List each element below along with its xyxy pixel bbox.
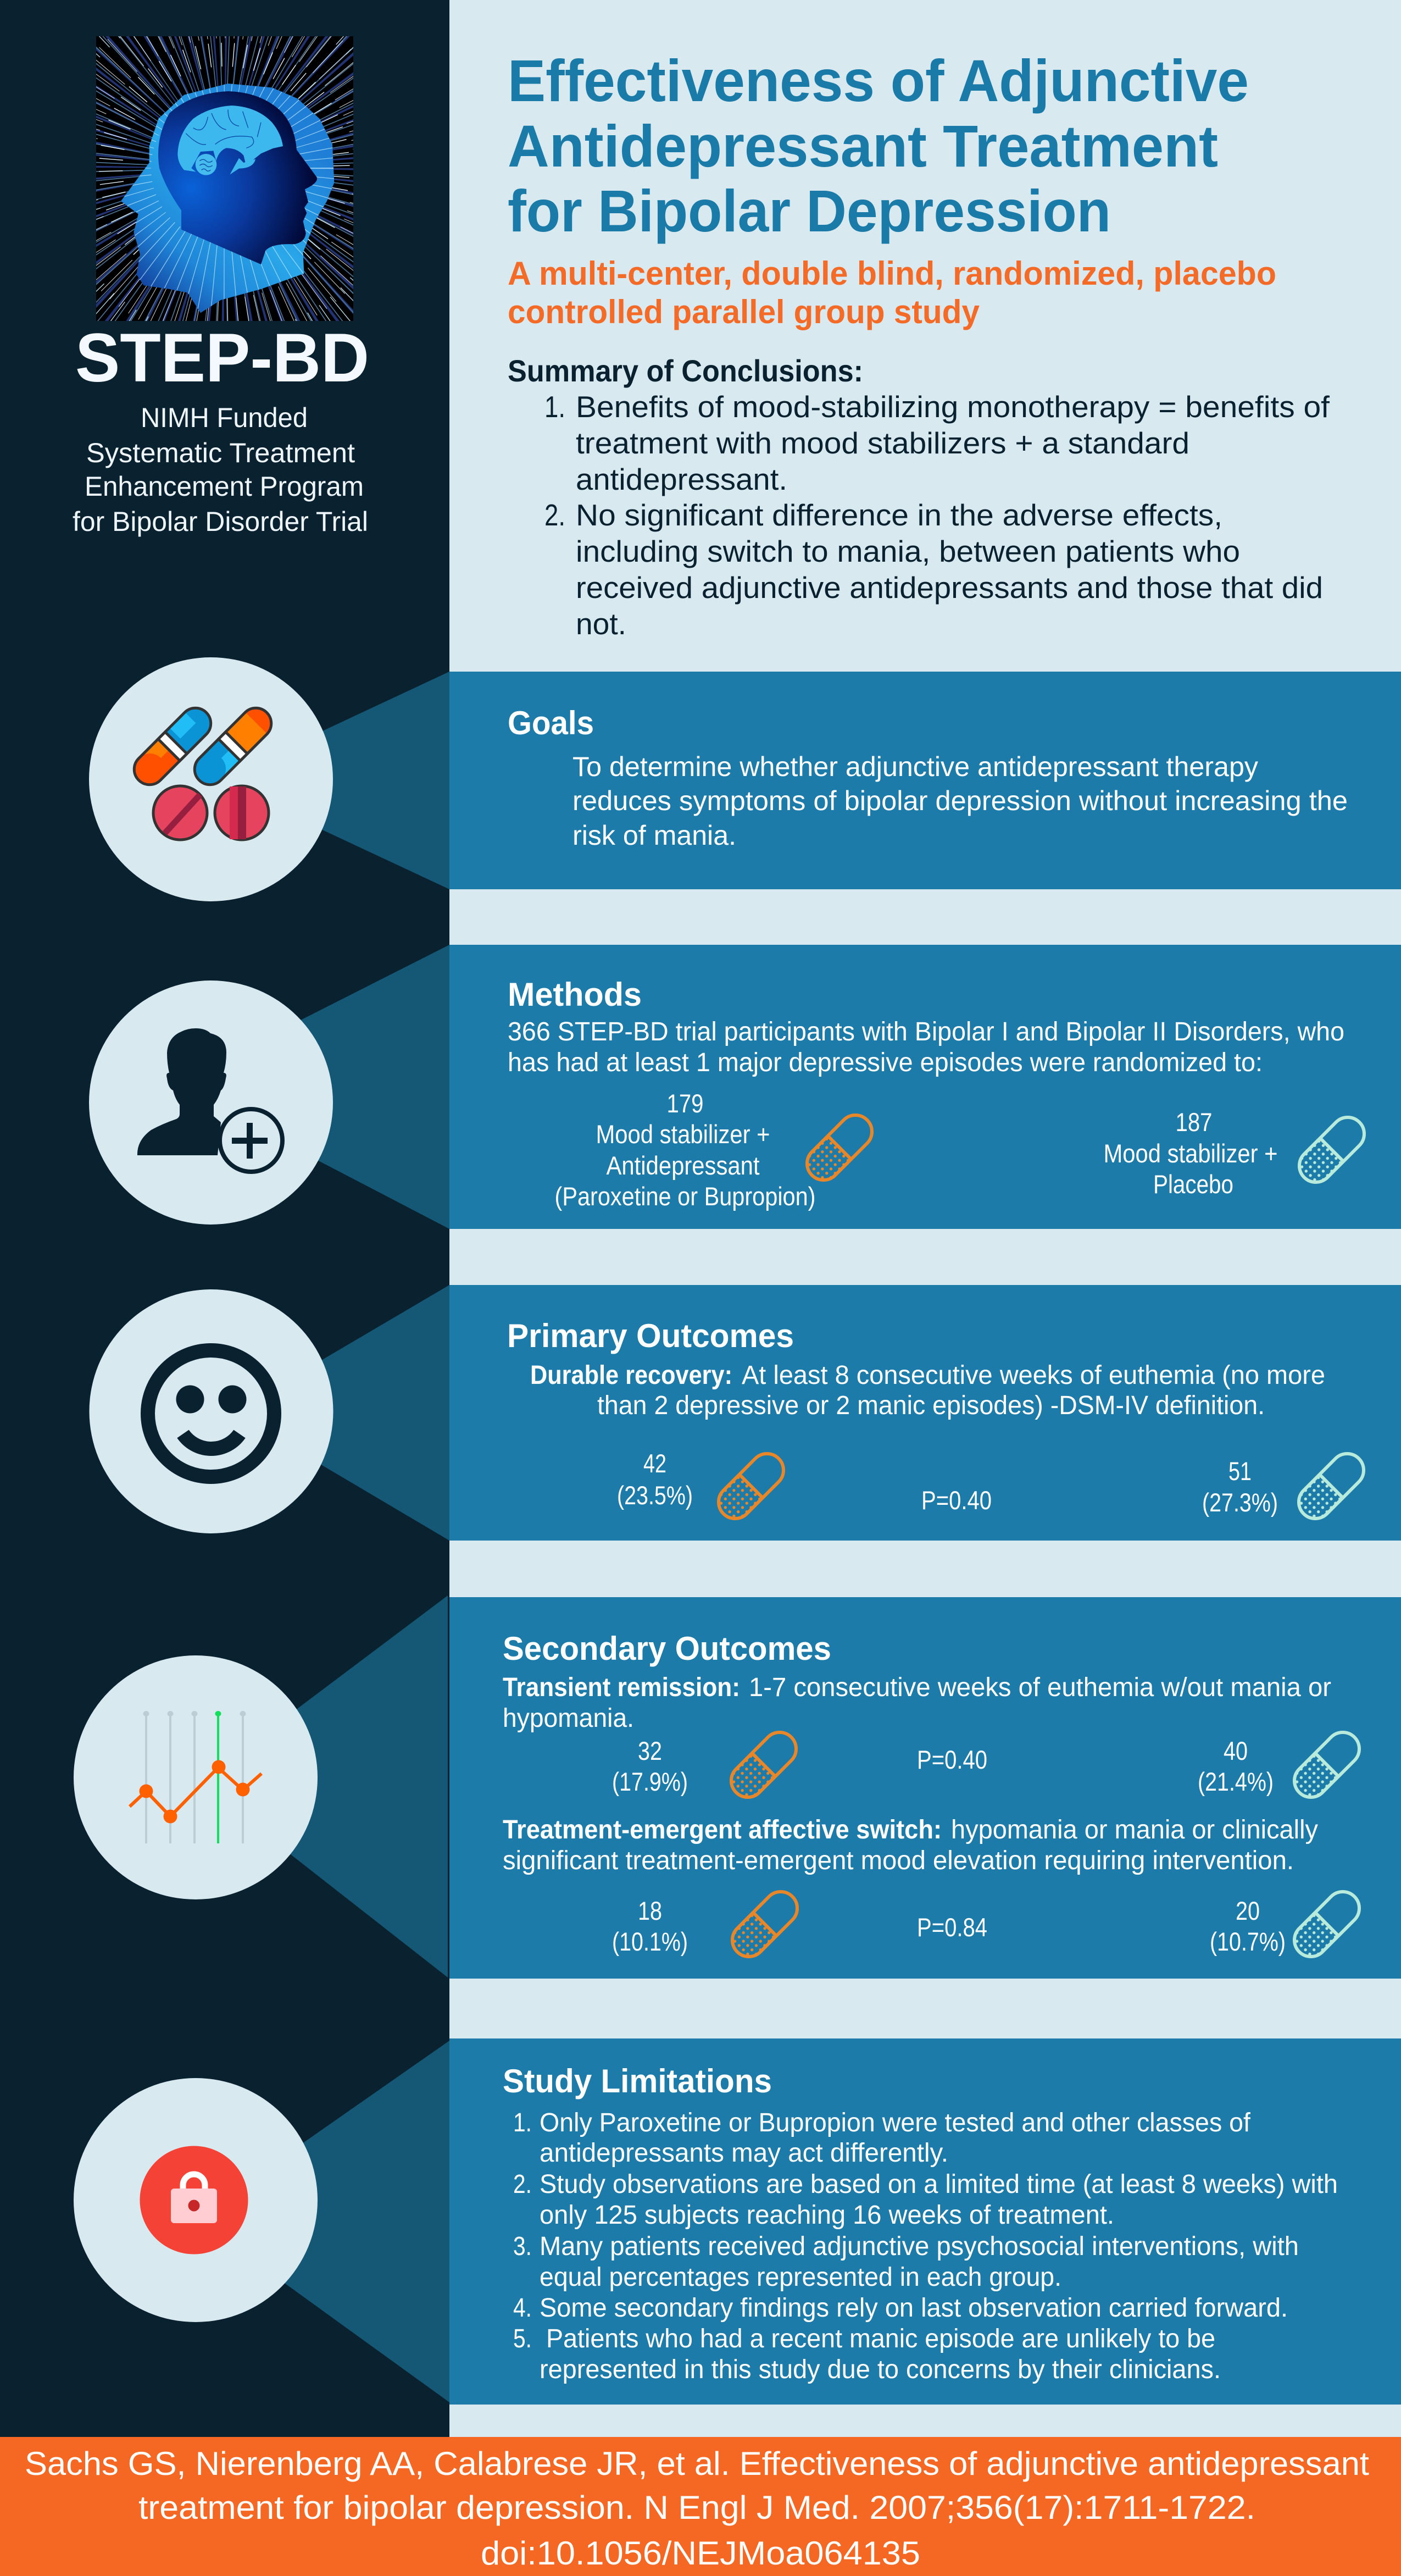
text block: limitations list: 4.	[513, 2294, 532, 2323]
panel: goals	[89, 657, 1401, 901]
heading: primary outcomes: Primary Outcomes	[507, 1317, 794, 1354]
heading: methods: Methods	[508, 976, 642, 1013]
stat: treatment arm 18: 18	[638, 1896, 662, 1925]
text block: limitations list: 1.	[513, 2108, 532, 2137]
subtitle: A multi-center, double blind, randomized, placebo	[508, 255, 1276, 292]
text block: durable recovery definition: At least 8 consecutive weeks of euthemia (no more	[742, 1361, 1325, 1390]
text block: summary of conclusions: Benefits of mood-stabilizing monotherapy = benefits of	[576, 390, 1330, 424]
text block: summary of conclusions: not.	[576, 607, 626, 641]
text block: limitations list: antidepressants may act differently.	[540, 2139, 948, 2168]
text block: goals body	[572, 751, 1348, 851]
text block: program description	[73, 402, 368, 537]
text block: goals body: To determine whether adjunctive antidepressant therapy	[572, 751, 1258, 782]
footer: citation: doi:10.1056/NEJMoa064135	[481, 2535, 920, 2572]
stat: treatment arm 32	[612, 1736, 688, 1796]
text block: limitations list: 3.	[513, 2232, 532, 2261]
text block: limitations list: equal percentages represented in each group.	[540, 2263, 1061, 2292]
icon: orange pill	[800, 1109, 879, 1187]
text block: limitations list: Many patients received adjunctive psychosocial interventions, with	[540, 2232, 1299, 2261]
title: Antidepressant Treatment	[508, 113, 1218, 179]
stat: placebo arm 20	[1210, 1896, 1286, 1956]
footer: citation: Sachs GS, Nierenberg AA, Calabrese JR, et al. Effectiveness of adjunctive antidepressant	[25, 2445, 1369, 2482]
text block: goals body: reduces symptoms of bipolar depression without increasing the	[572, 785, 1348, 816]
text block: placebo arm: Mood stabilizer +	[1103, 1139, 1278, 1168]
text block: limitations list: Some secondary findings rely on last observation carried forward.	[540, 2294, 1288, 2323]
heading: study limitations: Study Limitations	[503, 2063, 772, 2099]
stat: placebo arm 51: 51	[1228, 1456, 1252, 1486]
icon: person with plus	[137, 1028, 282, 1172]
stat: treatment arm 18: (10.1%)	[612, 1927, 688, 1956]
icon: red lock	[140, 2146, 248, 2254]
footer: citation	[0, 2437, 1401, 2576]
icon: pills and tablets	[128, 702, 277, 840]
subtitle: controlled parallel group study	[508, 293, 980, 330]
panel: methods	[89, 945, 1401, 1229]
text block: limitations list	[513, 2108, 1338, 2384]
icon: smiley face	[148, 1350, 274, 1477]
text block: durable recovery definition	[530, 1361, 1325, 1420]
text block: durable recovery definition: Durable recovery:	[530, 1361, 732, 1390]
text block: treatment arm: Antidepressant	[607, 1151, 759, 1180]
text block: summary of conclusions: including switch to mania, between patients who	[576, 534, 1240, 568]
text block: treatment-emergent affective switch: significant treatment-emergent mood elevation requiring intervention.	[503, 1846, 1294, 1875]
text block: transient remission: 1-7 consecutive weeks of euthemia w/out mania or	[749, 1673, 1331, 1702]
text block: limitations list: 5.	[513, 2324, 532, 2353]
icon: teal pill	[1292, 1447, 1370, 1525]
left sidebar	[0, 0, 449, 2437]
text block: treatment arm: 179	[667, 1089, 703, 1118]
stat: treatment arm 42	[617, 1449, 693, 1510]
text block: placebo arm: 187	[1176, 1107, 1212, 1137]
panel: secondary outcomes	[74, 1596, 1401, 1979]
stat: treatment arm 32: (17.9%)	[612, 1767, 688, 1796]
text block: treatment arm: (Paroxetine or Bupropion)	[555, 1182, 815, 1211]
text block: summary of conclusions: received adjunctive antidepressants and those that did	[576, 570, 1323, 605]
text block: durable recovery definition: than 2 depressive or 2 manic episodes) -DSM-IV definition.	[597, 1391, 1265, 1420]
stat: p value: P=0.40	[917, 1745, 987, 1774]
text block: summary of conclusions: Summary of Conclusions:	[508, 353, 863, 388]
text block: program description: Enhancement Program	[85, 471, 364, 502]
stat: placebo arm 40: 40	[1224, 1736, 1248, 1765]
panel: study limitations	[74, 2038, 1401, 2405]
footer: citation: treatment for bipolar depression. N Engl J Med. 2007;356(17):1711-1722.	[138, 2489, 1255, 2526]
text block: treatment arm	[555, 1089, 815, 1211]
title	[508, 47, 1249, 244]
text block: limitations list: Study observations are based on a limited time (at least 8 weeks) with	[540, 2170, 1338, 2199]
stat: treatment arm 42: (23.5%)	[617, 1481, 693, 1510]
text block: methods body	[508, 1017, 1344, 1077]
icon: orange pill	[726, 1885, 804, 1963]
text block: methods body: 366 STEP-BD trial participants with Bipolar I and Bipolar II Disorders, who	[508, 1017, 1344, 1046]
text block: treatment arm: Mood stabilizer +	[596, 1120, 770, 1149]
text block: transient remission	[503, 1673, 1331, 1733]
text block: limitations list: only 125 subjects reaching 16 weeks of treatment.	[540, 2201, 1114, 2230]
subtitle	[508, 255, 1276, 330]
stat: placebo arm 20: (10.7%)	[1210, 1927, 1286, 1956]
icon: orange pill	[725, 1726, 803, 1804]
stat: p value: P=0.84	[917, 1913, 987, 1942]
text block: summary of conclusions: 1.	[544, 390, 565, 424]
text block: summary of conclusions: antidepressant.	[576, 462, 787, 496]
heading: STEP-BD: STEP-BD	[75, 320, 369, 396]
stat: treatment arm 42: 42	[643, 1449, 666, 1478]
text block: methods body: has had at least 1 major depressive episodes were randomized to:	[508, 1048, 1263, 1077]
text block: transient remission: Transient remission:	[503, 1673, 740, 1702]
text block: transient remission: hypomania.	[503, 1704, 634, 1733]
text block: placebo arm	[1103, 1107, 1278, 1199]
text block: limitations list: Only Paroxetine or Bupropion were tested and other classes of	[540, 2108, 1251, 2137]
text block: program description: NIMH Funded	[141, 402, 308, 433]
icon: teal pill	[1288, 1885, 1366, 1963]
stat: placebo arm 20: 20	[1236, 1896, 1260, 1925]
text block: treatment-emergent affective switch: hypomania or mania or clinically	[951, 1815, 1318, 1844]
text block: summary of conclusions: 2.	[544, 498, 565, 532]
text block: summary of conclusions	[508, 353, 1330, 641]
text block: limitations list: Patients who had a recent manic episode are unlikely to be	[546, 2324, 1215, 2353]
icon: line chart	[130, 1711, 262, 1843]
text block: treatment-emergent affective switch: Treatment-emergent affective switch:	[503, 1815, 942, 1844]
text block: summary of conclusions: No significant difference in the adverse effects,	[576, 498, 1222, 532]
panel: primary outcomes	[89, 1285, 1401, 1541]
text block: goals body: risk of mania.	[572, 820, 736, 851]
stat: treatment arm 32: 32	[638, 1736, 662, 1765]
stat: placebo arm 40	[1198, 1736, 1274, 1796]
text block: program description: for Bipolar Disorder Trial	[73, 506, 368, 537]
stat: p value: P=0.40	[921, 1486, 992, 1515]
stat: treatment arm 18	[612, 1896, 688, 1956]
image: glowing head with brain	[96, 36, 353, 321]
stat: placebo arm 51	[1202, 1456, 1278, 1517]
icon: teal pill	[1288, 1726, 1366, 1804]
text block: limitations list: represented in this study due to concerns by their clinicians.	[540, 2355, 1221, 2384]
icon: orange pill	[712, 1447, 790, 1525]
icon: teal pill	[1293, 1111, 1371, 1189]
text block: limitations list: 2.	[513, 2170, 532, 2199]
text block: program description: Systematic Treatment	[86, 437, 355, 468]
text block: placebo arm: Placebo	[1153, 1170, 1233, 1199]
text block: treatment-emergent affective switch	[503, 1815, 1318, 1875]
heading: secondary outcomes: Secondary Outcomes	[503, 1630, 831, 1667]
heading: goals: Goals	[508, 705, 594, 741]
title: for Bipolar Depression	[508, 178, 1111, 244]
stat: placebo arm 51: (27.3%)	[1202, 1488, 1278, 1517]
stat: placebo arm 40: (21.4%)	[1198, 1767, 1274, 1796]
title: Effectiveness of Adjunctive	[508, 47, 1249, 114]
text block: summary of conclusions: treatment with mood stabilizers + a standard	[576, 426, 1189, 460]
